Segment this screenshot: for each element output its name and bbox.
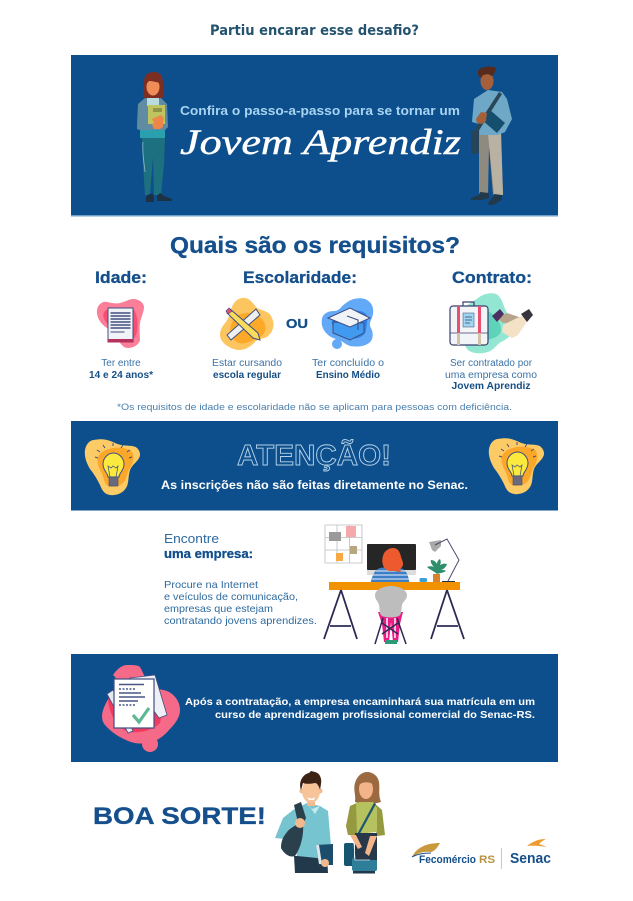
logo: Fecomércio RS: Fecomércio: [419, 854, 476, 866]
panel: escolaridade: [212, 268, 384, 381]
plant and cup: [420, 559, 447, 582]
text: encontre description: [164, 579, 317, 627]
logo: Senac: Senac: [510, 850, 551, 867]
logo: Fecomércio RS: [412, 843, 495, 866]
logo: Senac: [510, 839, 551, 867]
icon: document on pink blob: [97, 299, 144, 348]
illustration: two students: [275, 771, 385, 874]
monitor: [367, 544, 416, 575]
page content: [71, 55, 558, 874]
panel: contrato: [445, 268, 537, 392]
text: ensino medio: Ensino Médio: [316, 370, 380, 381]
text: contrato: Ser contratado por: [450, 358, 533, 369]
footnote: *Os requisitos de idade e escolaridade não se aplicam para pessoas com deficiência.: [117, 402, 512, 413]
chair: [375, 586, 407, 618]
panel: hero banner: [71, 55, 558, 216]
text: escola regular: escola regular: [213, 370, 281, 381]
banner script title: Jovem Aprendiz: [180, 122, 461, 162]
icon: pencil and ruler: [220, 298, 273, 350]
woman torso: [370, 567, 410, 587]
text: contratação: Após a contratação, a empresa encaminhará sua matrícula em um: [185, 696, 535, 708]
text: contrato: Jovem Aprendiz: [452, 381, 530, 392]
text: encontre description: Procure na Internet: [164, 579, 258, 591]
heading: escolaridade: Escolaridade:: [243, 268, 357, 287]
heading: atenção: ATENÇÃO!: [237, 438, 391, 472]
illustration: woman at desk: [324, 525, 464, 644]
stool legs: [375, 618, 406, 644]
text: ensino medio: [312, 358, 384, 381]
text: encontre description: contratando jovens aprendizes.: [164, 615, 317, 627]
text: encontre heading: uma empresa:: [164, 546, 253, 561]
woman: [344, 772, 385, 874]
panel: atenção banner: [71, 421, 558, 510]
text: contratação: [185, 696, 535, 721]
panel: idade: [89, 268, 153, 381]
logo: Fecomércio RS: RS: [479, 854, 495, 866]
text: encontre heading: Encontre: [164, 531, 219, 546]
icon: right light bulb: [489, 438, 544, 494]
text: contrato: uma empresa como: [445, 370, 537, 381]
text: escola regular: [212, 358, 282, 381]
panel: contratação banner: [71, 654, 558, 762]
icon: left light bulb: [85, 439, 140, 495]
heading: requirements: Quais são os requisitos?: [170, 232, 460, 258]
text: idade: 14 e 24 anos*: [89, 370, 153, 381]
banner subtitle: Confira o passo-a-passo para se tornar um: [180, 103, 460, 118]
text: escola regular: Estar cursando: [212, 358, 282, 369]
wall grid: [325, 525, 362, 563]
text: encontre heading: [164, 531, 253, 561]
heading: boa sorte: BOA SORTE!: [93, 803, 266, 830]
lamp: [429, 539, 459, 583]
text: ensino medio: Ter concluído o: [312, 358, 384, 369]
icon: briefcase and handshake: [450, 293, 533, 353]
text: encontre description: e veículos de comunicação,: [164, 591, 298, 603]
text: atenção message: As inscrições não são feitas diretamente no Senac.: [161, 478, 468, 492]
text: contratação: curso de aprendizagem profissional comercial do Senac-RS.: [215, 709, 535, 721]
man: [275, 771, 333, 873]
text: ou: OU: [286, 316, 308, 331]
icon: checked documents: [102, 665, 180, 752]
text: idade: Ter entre: [101, 358, 141, 369]
woman hair: [382, 548, 403, 572]
illustration: student man: [471, 67, 512, 205]
desk: [329, 582, 460, 590]
panel: encontre uma empresa: [164, 525, 464, 644]
text: contrato: [445, 358, 537, 392]
logo divider: [501, 848, 502, 869]
title: Partiu encarar esse desafio?: [210, 23, 419, 39]
text: idade: [89, 358, 153, 381]
heading: contrato: Contrato:: [452, 268, 532, 287]
desk legs: [324, 590, 464, 639]
heading: idade: Idade:: [95, 268, 147, 287]
text: encontre description: empresas que estejam: [164, 603, 273, 615]
illustration: student woman: [137, 72, 172, 202]
woman legs: [378, 612, 403, 644]
icon: graduation cap: [322, 298, 373, 349]
